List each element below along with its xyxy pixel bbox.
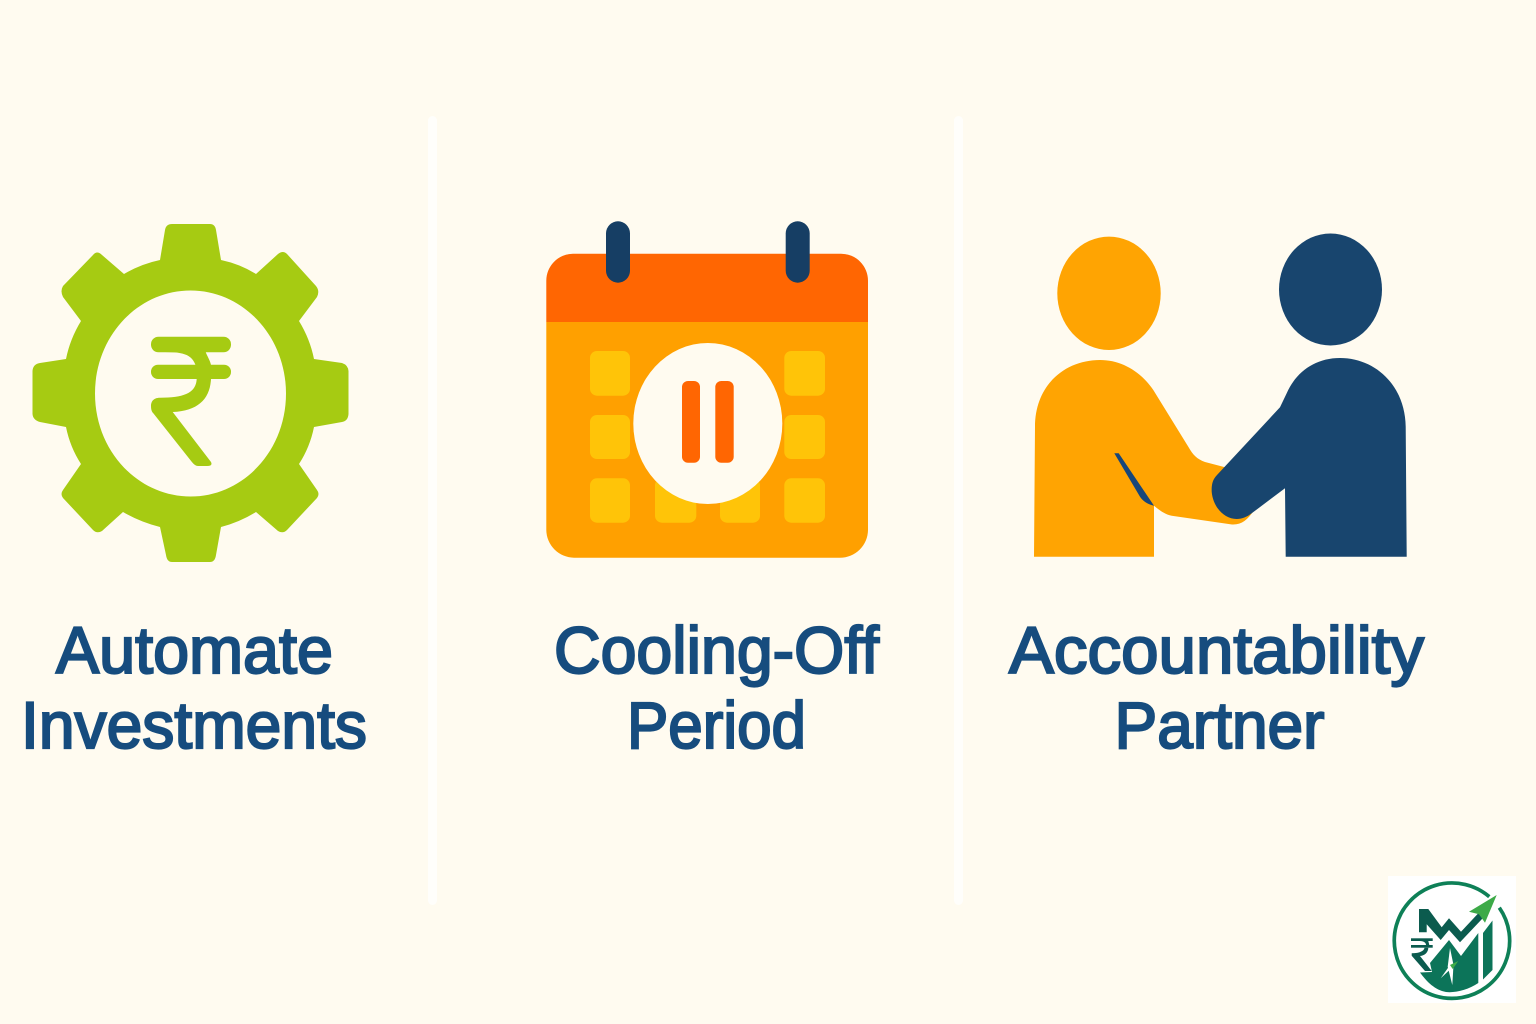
- heading: accountability partner: Partner: [1114, 688, 1324, 762]
- logo zigzag: [1419, 909, 1483, 942]
- icon: gear with rupee: [32, 224, 348, 562]
- heading: cooling-off period: [554, 613, 880, 762]
- logo compass needle: [1441, 948, 1458, 985]
- heading: automate investments: [21, 613, 367, 762]
- logo arrow: [1469, 895, 1497, 923]
- panel: automate investments: [21, 224, 367, 762]
- heading: accountability partner: [1009, 613, 1424, 762]
- logo: [1388, 876, 1516, 1003]
- heading: cooling-off period: Cooling-Off: [554, 613, 880, 687]
- icon: calendar with pause: [546, 221, 868, 558]
- heading: automate investments: Investments: [21, 688, 367, 762]
- heading: cooling-off period: Period: [627, 688, 806, 762]
- logo ring: [1394, 883, 1510, 998]
- heading: accountability partner: Accountability: [1009, 613, 1424, 687]
- panel: cooling-off period: [546, 221, 880, 762]
- icon: two people shaking hands: [1034, 234, 1407, 557]
- heading: automate investments: Automate: [56, 613, 333, 687]
- logo mountain and bar: [1420, 920, 1492, 992]
- logo rupee: [1411, 938, 1433, 971]
- icon: rupee symbol: [151, 337, 231, 466]
- panel: accountability partner: [1009, 234, 1424, 762]
